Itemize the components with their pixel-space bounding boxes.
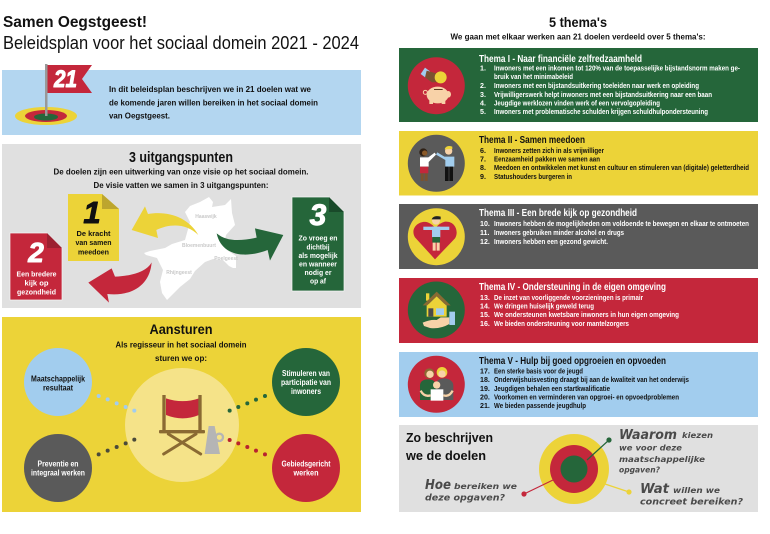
text: Thema III: Thema III - Een brede kijk op gezondheid: [479, 207, 637, 219]
text: Thema V: Thema V - Hulp bij goed opgroeien en opvoeden: [479, 355, 666, 367]
text: Thema III: [479, 207, 749, 246]
text: Thema V: 19.: [480, 385, 490, 393]
text: Thema IV: 15.: [480, 311, 490, 319]
text: Thema IV: De inzet van voorliggende voorzieningen is primair: [494, 294, 643, 302]
heading: 5 thema's: We gaan met elkaar werken aan 21 doelen verdeeld over 5 thema's:: [450, 32, 706, 42]
text: Thema III: Inwoners gebruiken minder alcohol en drugs: [494, 229, 624, 237]
intro text: [109, 85, 318, 120]
text: Thema I: 4.: [480, 100, 486, 108]
title: Samen Oegstgeest!: [3, 14, 147, 31]
card 3: Zo vroeg en dichtbij: op af: [310, 276, 326, 286]
text: Thema I: Inwoners met problematische schulden krijgen schuldhulpondersteuning: [494, 108, 708, 116]
text: Thema I: Vrijwilligerswerk helpt inwoners met een bijstandsuitkering naar een baan: [494, 91, 712, 99]
text: waarom: maatschappelijke: [619, 455, 706, 464]
card 3: Zo vroeg en dichtbij: nodig er: [304, 268, 332, 277]
central circle with director's chair: [125, 368, 239, 482]
circle: Stimuleren van participatie van inwoners: [272, 348, 340, 416]
card 2: Een bredere kijk op gezondheid: gezondheid: [17, 288, 56, 296]
heading: zo beschrijven we de doelen: [405, 430, 493, 463]
map of Oegstgeest: Rhijngeest: [166, 270, 192, 276]
circle: Maatschappelijk resultaat: [24, 348, 92, 416]
icon: two people high five: [408, 135, 465, 192]
circle: Preventie en integraal werken: [24, 434, 92, 502]
panel: Thema V: [399, 352, 758, 417]
heading: 3 uitgangspunten: 3 uitgangspunten: [129, 150, 233, 166]
circle: Stimuleren van participatie van inwoners: Stimuleren van: [282, 369, 330, 378]
icon: family: [408, 356, 465, 413]
intro text: de komende jaren willen bereiken in het sociaal domein: [109, 98, 318, 108]
text: Thema II: Inwoners zetten zich in als vrijwilliger: [494, 147, 604, 155]
text: Thema V: Onderwijshuisvesting draagt bij aan de kwaliteit van het onderwijs: [494, 376, 689, 384]
text: Thema V: 21.: [480, 402, 490, 410]
heading: aansturen: Aansturen: [150, 321, 212, 337]
text: Thema I: Inwoners met een inkomen tot 120% van de toepasselijke bijstandsnorm maken ge-: [494, 64, 741, 72]
text: waarom: Waarom: [619, 428, 677, 443]
heading: 3 uitgangspunten: De visie vatten we samen in 3 uitgangspunten:: [94, 180, 269, 190]
icon: golf flag with 21: 21: [53, 66, 77, 93]
card 1: De kracht van samen meedoen: [68, 194, 119, 261]
circle: Maatschappelijk resultaat: Maatschappelijk: [31, 374, 86, 384]
icon: house on hand: [408, 282, 465, 338]
text: Thema I: 1.: [480, 64, 486, 72]
heading: 5 thema's: [450, 14, 706, 42]
text: Thema I: bruik van het minimabeleid: [494, 73, 573, 81]
panel: 3 uitgangspunten: [2, 144, 361, 308]
text: Thema III: Inwoners hebben een gezond gewicht.: [494, 238, 608, 246]
heading: 5 thema's: 5 thema's: [549, 14, 607, 30]
text: Thema I: 5.: [480, 108, 486, 116]
circle: Gebiedsgericht werken: werken: [293, 468, 319, 478]
panel: Thema IV: [399, 278, 758, 343]
text: Thema V: 20.: [480, 394, 490, 402]
text: waarom: we voor deze: [619, 444, 683, 452]
panel: Thema II: [399, 131, 758, 196]
text: Thema IV: We ondersteunen kwetsbare inwoners in hun eigen omgeving: [494, 311, 679, 319]
card 2: Een bredere kijk op gezondheid: Een bredere: [16, 270, 56, 278]
text: Thema IV: We dringen huiselijk geweld terug: [494, 302, 594, 310]
panel: Thema III: [399, 204, 758, 269]
text: wat: concreet bereiken?: [640, 498, 743, 508]
intro text: In dit beleidsplan beschrijven we in 21 doelen wat we: [109, 85, 311, 94]
panel: Thema I: [399, 48, 758, 122]
text: Thema IV: 13.: [480, 294, 490, 302]
circle: Maatschappelijk resultaat: resultaat: [43, 384, 73, 392]
text: Thema II: [479, 134, 749, 181]
text: Thema V: Voorkomen en verminderen van opgroei- en opvoedproblemen: [494, 394, 679, 402]
circle: Stimuleren van participatie van inwoners: participatie van: [281, 378, 331, 387]
map of Oegstgeest: Haaswijk: [195, 214, 217, 220]
heading: aansturen: Als regisseur in het sociaal domein: [116, 340, 246, 350]
title: [3, 14, 359, 53]
card 3: Zo vroeg en dichtbij: 3: [310, 199, 327, 232]
heading: 3 uitgangspunten: De doelen zijn een uitwerking van onze visie op het sociaal domein.: [54, 166, 308, 176]
text: Thema II: 6.: [480, 147, 486, 155]
arrow: red to point 2: [88, 262, 152, 303]
map of Oegstgeest: Poelgeest: [214, 256, 238, 262]
icon: director's chair and megaphone: [159, 395, 223, 454]
text: Thema I: 2.: [480, 82, 486, 90]
heading: aansturen: [116, 321, 246, 363]
text: hoe: bereiken we: [454, 482, 518, 491]
heading: 3 uitgangspunten: [54, 150, 308, 190]
heading: zo beschrijven we de doelen: we de doelen: [405, 448, 486, 463]
text: hoe: Hoe: [425, 478, 451, 493]
dotted connectors: [97, 394, 267, 456]
card 3: Zo vroeg en dichtbij: als mogelijk: [298, 251, 338, 260]
circle: Preventie en integraal werken: integraal werken: [31, 468, 85, 478]
text: Thema II: Eenzaamheid pakken we samen aan: [494, 156, 600, 164]
text: Thema I: [479, 53, 741, 116]
text: waarom: [619, 428, 713, 474]
card 3: Zo vroeg en dichtbij: [292, 197, 344, 291]
icon: piggy bank: [408, 57, 465, 114]
text: Thema III: 11.: [480, 229, 489, 237]
text: Thema III: 12.: [480, 238, 490, 246]
panel: zo beschrijven we de doelen: [399, 425, 758, 512]
text: hoe: [425, 478, 518, 504]
card 2: Een bredere kijk op gezondheid: [10, 233, 62, 300]
text: wat: [640, 482, 743, 508]
title: Beleidsplan voor het sociaal domein 2021 - 2024: [3, 32, 359, 53]
card 1: De kracht van samen meedoen: 1: [83, 195, 101, 230]
text: Thema V: Jeugdigen behalen een startkwalificatie: [494, 385, 610, 393]
card 2: Een bredere kijk op gezondheid: 2: [27, 237, 44, 268]
text: Thema I: Thema I - Naar financiële zelfredzaamheld: [479, 53, 642, 65]
text: Thema II: 9.: [480, 173, 486, 181]
card 1: De kracht van samen meedoen: meedoen: [78, 248, 109, 256]
card 3: Zo vroeg en dichtbij: en wanneer: [299, 260, 337, 268]
card 3: Zo vroeg en dichtbij: Zo vroeg en: [298, 234, 338, 242]
card 1: De kracht van samen meedoen: De kracht: [76, 229, 111, 238]
text: Thema III: 10.: [480, 220, 490, 228]
text: waarom: kiezen: [682, 431, 713, 440]
panel: aansturen: [2, 317, 361, 512]
text: Thema IV: Thema IV - Ondersteuning in de eigen omgeving: [479, 281, 666, 293]
arrow: green to point 3: [217, 228, 283, 261]
text: Thema II: Thema II - Samen meedoen: [479, 134, 585, 146]
text: Thema I: Jeugdige werklozen vinden werk of een vervolgopleiding: [494, 100, 660, 108]
text: hoe: deze opgaven?: [425, 494, 505, 504]
panel: introduction: [2, 64, 361, 135]
text: waarom: opgaven?: [619, 466, 660, 474]
text: wat: Wat: [640, 482, 670, 497]
text: Thema II: 8.: [480, 164, 486, 172]
text: Thema I: 3.: [480, 91, 486, 99]
text: Thema V: 17.: [480, 368, 490, 376]
intro text: van Oegstgeest.: [109, 112, 170, 120]
text: Thema V: 18.: [480, 376, 490, 384]
text: Thema V: [479, 355, 689, 410]
circle: Gebiedsgericht werken: Gebiedsgericht: [282, 460, 331, 468]
card 1: De kracht van samen meedoen: van samen: [76, 238, 112, 247]
heading: zo beschrijven we de doelen: Zo beschrijven: [406, 430, 493, 445]
icon: golf flag with 21: [15, 64, 92, 125]
text: Thema V: Een sterke basis voor de jeugd: [494, 368, 583, 376]
circle: Preventie en integraal werken: Preventie en: [38, 460, 79, 468]
text: Thema IV: We bieden ondersteuning voor mantelzorgers: [494, 320, 629, 328]
text: Thema IV: 14.: [480, 302, 490, 310]
icon: heart with person: [408, 208, 465, 265]
circle: Stimuleren van participatie van inwoners: inwoners: [291, 387, 322, 396]
text: Thema IV: 16.: [480, 320, 490, 328]
map of Oegstgeest: [144, 197, 238, 300]
text: Thema II: 7.: [480, 156, 486, 164]
text: wat: willen we: [673, 486, 721, 495]
text: Thema II: Statushouders burgeren in: [494, 173, 572, 181]
text: Thema V: We bieden passende jeugdhulp: [494, 402, 587, 410]
card 2: Een bredere kijk op gezondheid: kijk op: [24, 278, 49, 288]
card 3: Zo vroeg en dichtbij: dichtbij: [306, 242, 330, 252]
arrow: yellow to point 1: [132, 206, 198, 238]
text: Thema IV: [479, 281, 679, 328]
target diagram: [521, 434, 632, 504]
heading: aansturen: sturen we op:: [155, 353, 207, 363]
circle: Gebiedsgericht werken: [272, 434, 340, 502]
text: Thema I: Inwoners met een bijstandsuitkering toeleiden naar werk en opleiding: [494, 82, 699, 90]
map of Oegstgeest: Bloemenbuurt: [182, 243, 216, 249]
